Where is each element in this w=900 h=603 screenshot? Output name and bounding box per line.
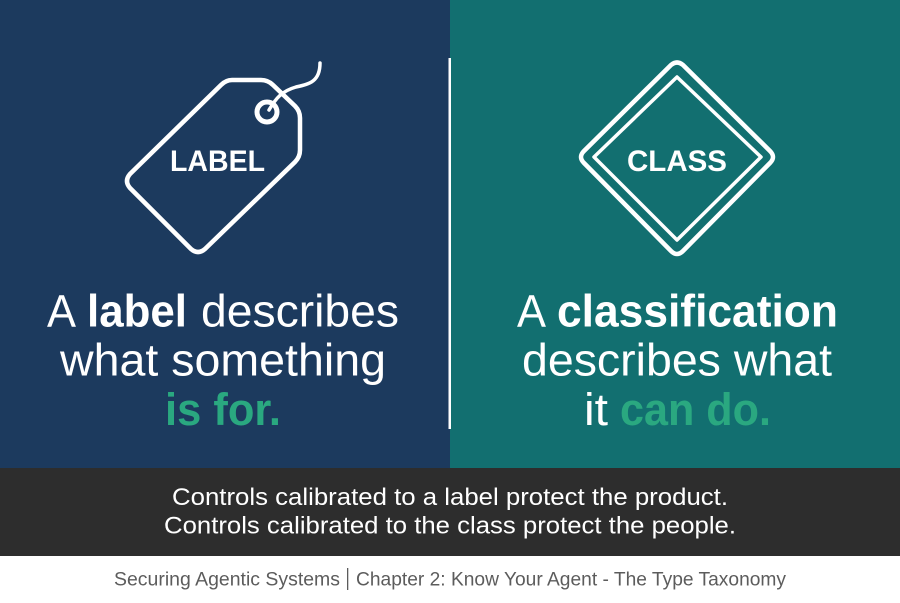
heading: classification statement: A [517,286,546,336]
heading: label statement: A [47,286,76,336]
center divider line [448,58,451,429]
heading: classification statement: describes what [522,334,833,386]
panel: classification (teal) [450,0,900,468]
heading: classification statement: can do. [620,384,771,435]
heading: label statement: label [87,286,187,336]
panel: label (navy) [0,0,450,468]
heading: classification statement: it [584,384,609,435]
icon: price tag with LABEL: LABEL [170,145,265,178]
footer: source line [114,568,786,590]
icon: diamond with CLASS: CLASS [627,145,727,178]
banner: dark takeaway bar: Controls calibrated to a label protect the product. [172,484,728,511]
heading: classification statement [517,286,838,435]
heading: label statement: is for. [165,384,281,435]
heading: classification statement: classification [557,286,838,336]
icon: diamond with CLASS [581,62,773,254]
banner: dark takeaway bar [0,468,900,556]
footer: source line: Securing Agentic Systems [114,568,340,590]
icon: price tag with LABEL [127,63,320,252]
footer: source line: Chapter 2: Know Your Agent - The Type Taxonomy [356,568,786,590]
heading: label statement: describes [201,286,399,336]
heading: label statement: what something [59,334,386,386]
heading: label statement [47,286,399,435]
banner: dark takeaway bar: Controls calibrated to the class protect the people. [164,512,736,540]
